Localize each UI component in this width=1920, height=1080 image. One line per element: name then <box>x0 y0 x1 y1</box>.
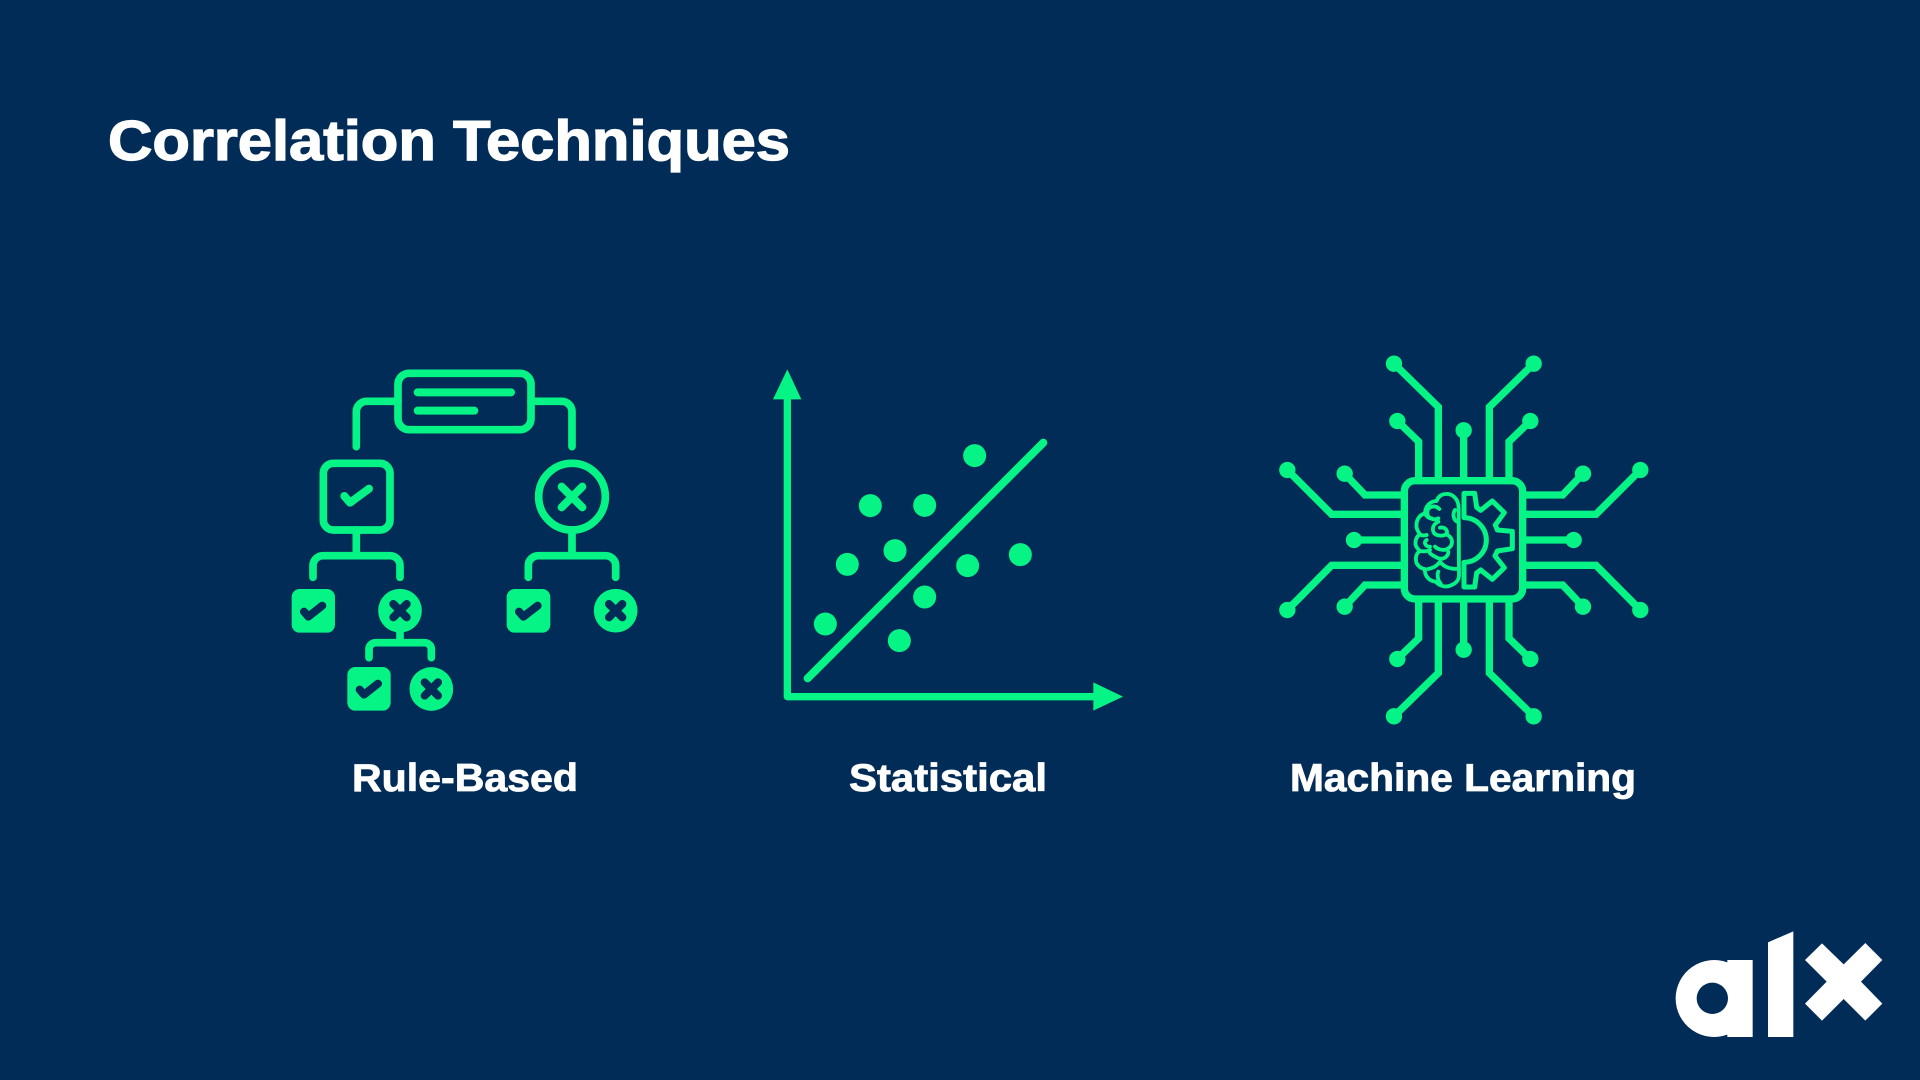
data points <box>814 444 1032 652</box>
circuit traces <box>1287 364 1640 716</box>
logo: alx <box>1676 931 1882 1037</box>
title: Correlation Techniques <box>108 109 790 173</box>
panel: statistical <box>773 369 1123 800</box>
panel: rule-based <box>292 373 637 800</box>
trend line <box>808 443 1043 678</box>
icon: scatter plot <box>773 369 1123 711</box>
letter l <box>1768 931 1793 1037</box>
letter x <box>1805 943 1882 1021</box>
filled check leaf <box>507 589 550 633</box>
trace end nodes <box>1279 355 1648 724</box>
label: Rule-Based: Rule-Based <box>352 757 578 800</box>
icon: AI chip <box>1279 355 1648 724</box>
filled cross leaf <box>409 667 453 711</box>
gear half <box>1464 493 1512 587</box>
filled cross leaf <box>378 589 422 632</box>
filled check leaf <box>292 589 335 633</box>
tree root box <box>398 373 531 430</box>
outline check node <box>323 463 390 530</box>
icon: decision tree <box>292 373 637 711</box>
chip body <box>1404 481 1523 599</box>
label: Statistical: Statistical <box>849 757 1047 800</box>
axes <box>773 369 1123 711</box>
filled cross leaf <box>594 589 637 632</box>
outline cross node <box>539 463 605 530</box>
brain half <box>1415 494 1459 586</box>
filled check leaf <box>347 667 391 711</box>
panel: machine learning <box>1279 355 1648 800</box>
label: Machine Learning: Machine Learning <box>1290 757 1636 800</box>
letter a <box>1676 960 1753 1037</box>
tree branches <box>313 401 616 658</box>
